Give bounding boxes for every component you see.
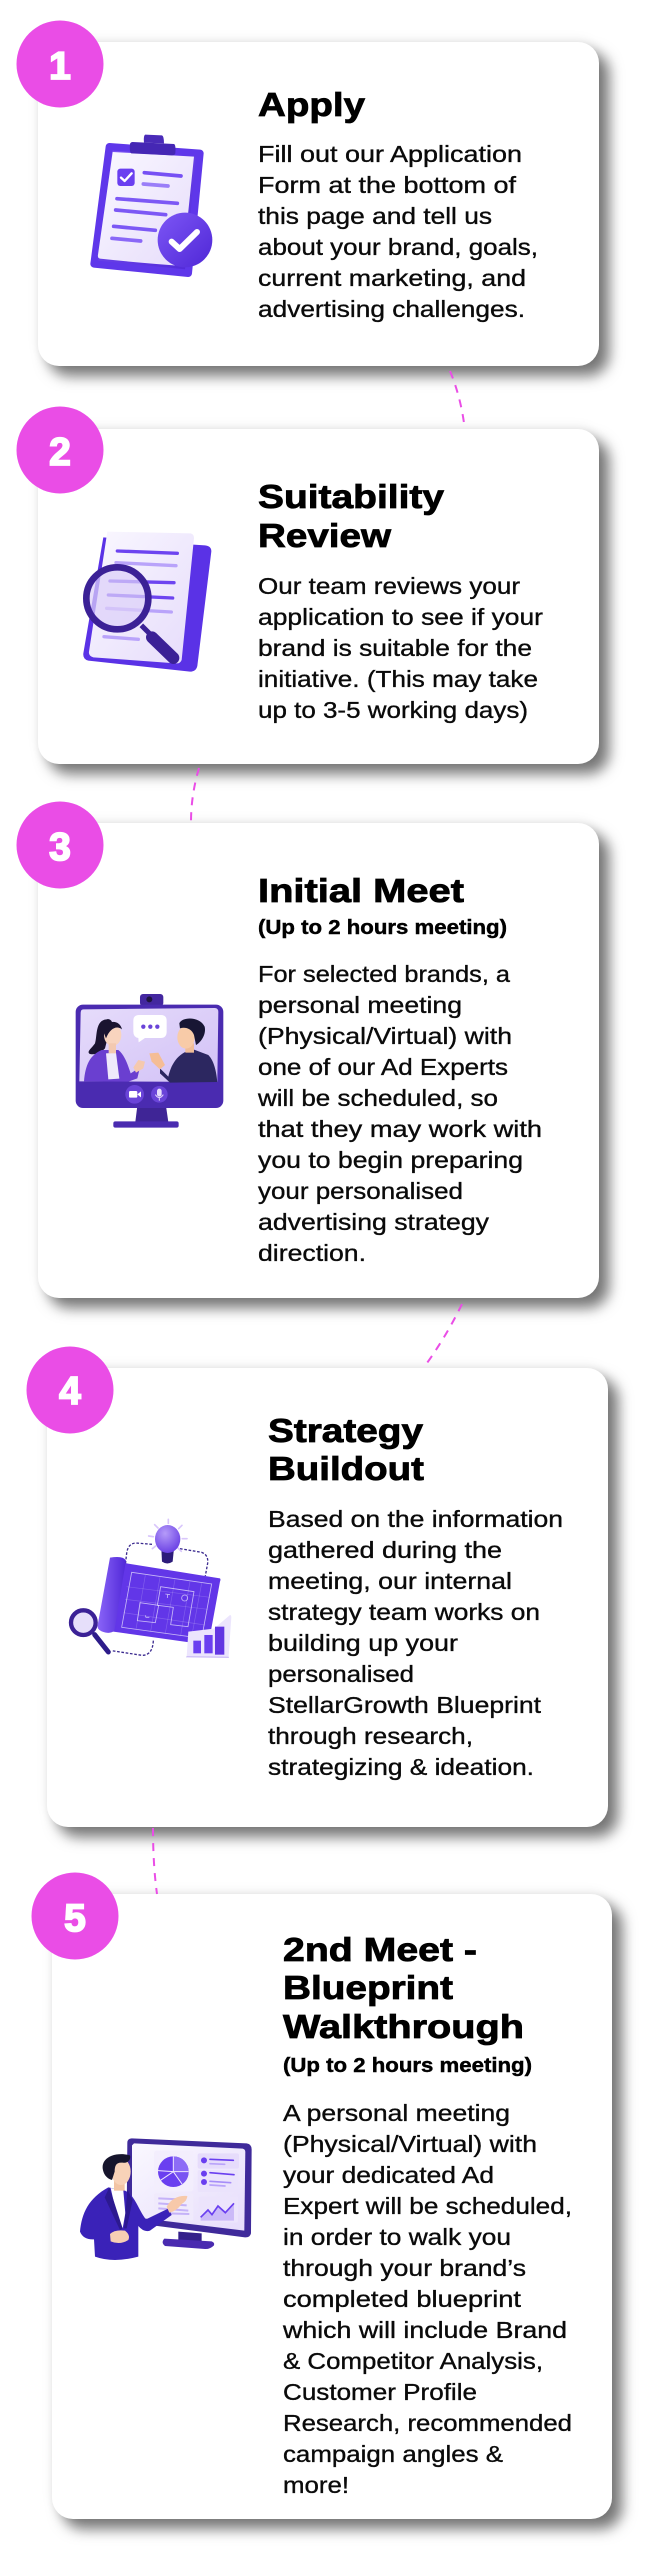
body text: personal meeting [258, 992, 462, 1018]
body text [268, 1506, 563, 1780]
body text: direction. [258, 1240, 366, 1266]
card background [52, 1894, 612, 2519]
woman [89, 1019, 112, 1054]
step number badge 2: 2 [49, 431, 71, 474]
body text: your personalised [258, 1178, 463, 1204]
heading: Buildout [268, 1450, 424, 1487]
step number badge 5: 5 [64, 1897, 86, 1940]
body text: through research, [268, 1723, 473, 1749]
body text: Customer Profile [283, 2379, 477, 2405]
body text: this page and tell us [258, 203, 492, 229]
heading: Apply [258, 86, 366, 123]
body text: campaign angles & [283, 2441, 503, 2467]
body text: completed blueprint [283, 2286, 522, 2312]
step number badge 4 [26, 1346, 114, 1434]
body text [258, 141, 538, 322]
body text: Research, recommended [283, 2410, 572, 2436]
connector: step 4 to step 5 [153, 1828, 157, 1894]
body text: up to 3-5 working days) [258, 697, 528, 723]
heading [283, 1931, 524, 2045]
icon: video call monitor [76, 994, 223, 1128]
body text: about your brand, goals, [258, 234, 538, 260]
step number badge 5 [32, 1872, 118, 1960]
body text: Our team reviews your [258, 573, 520, 599]
body text: application to see if your [258, 604, 543, 630]
body text: advertising challenges. [258, 296, 525, 322]
heading: Blueprint [283, 1969, 453, 2006]
heading: Suitability [258, 478, 445, 515]
body text [282, 2100, 572, 2498]
heading: Initial Meet [258, 872, 464, 909]
panel: step 1 apply [16, 20, 599, 366]
heading: Review [258, 517, 391, 554]
body text: which will include Brand [282, 2317, 567, 2343]
speech bubble [133, 1015, 167, 1042]
body text: in order to walk you [283, 2224, 511, 2250]
body text: you to begin preparing [258, 1147, 523, 1173]
heading: 2nd Meet - [283, 1931, 477, 1968]
body text: through your brand’s [283, 2255, 526, 2281]
card background [38, 823, 599, 1298]
step number badge 1: 1 [49, 45, 71, 88]
body text: For selected brands, a [258, 961, 510, 987]
body text [257, 961, 542, 1266]
body text: StellarGrowth Blueprint [268, 1692, 542, 1718]
body text: one of our Ad Experts [258, 1054, 508, 1080]
body text: Fill out our Application [258, 141, 522, 167]
body text: your dedicated Ad [283, 2162, 494, 2188]
body text: brand is suitable for the [258, 635, 532, 661]
panel: step 4 strategy buildout [26, 1346, 608, 1827]
body text: Form at the bottom of [258, 172, 517, 198]
connector: step 3 to step 4 [427, 1304, 462, 1363]
heading: Strategy [268, 1412, 424, 1449]
body text: strategy team works on [268, 1599, 540, 1625]
body text: (Physical/Virtual) with [258, 1023, 512, 1049]
body text: strategizing & ideation. [268, 1754, 534, 1780]
body text: meeting, our internal [268, 1568, 512, 1594]
card background [38, 42, 599, 366]
body text: & Competitor Analysis, [283, 2348, 543, 2374]
body text: (Physical/Virtual) with [283, 2131, 537, 2157]
step number badge 3 [16, 802, 104, 888]
connector: step 1 to step 2 [450, 371, 464, 423]
body text: advertising strategy [258, 1209, 490, 1235]
card background [47, 1368, 608, 1827]
step number badge 1 [16, 20, 104, 108]
card background [38, 429, 599, 764]
body text: will be scheduled, so [257, 1085, 498, 1111]
icon: presenter with dashboard monitor [80, 2138, 252, 2260]
panel: step 3 initial meet [16, 802, 599, 1298]
body text: building up your [268, 1630, 458, 1656]
icon: document and magnifier [83, 532, 211, 672]
panel: step 2 suitability review [16, 406, 599, 764]
subheading: (Up to 2 hours meeting) [283, 2055, 532, 2077]
heading [258, 478, 445, 554]
man [160, 1049, 217, 1083]
icon: clipboard with check [94, 135, 212, 273]
body text: personalised [268, 1661, 414, 1687]
body text: initiative. (This may take [258, 666, 538, 692]
icon: blueprint, bulb, chart and magnifier [71, 1519, 231, 1658]
body text: A personal meeting [283, 2100, 510, 2126]
body text: Based on the information [268, 1506, 563, 1532]
step number badge 2 [16, 406, 104, 494]
heading [268, 1412, 424, 1487]
step number badge 4: 4 [59, 1370, 81, 1413]
body text: gathered during the [268, 1537, 502, 1563]
connector: step 2 to step 3 [191, 768, 199, 822]
body text: Expert will be scheduled, [283, 2193, 572, 2219]
buttons [125, 1085, 144, 1104]
subheading: (Up to 2 hours meeting) [258, 917, 507, 939]
body text [258, 573, 543, 723]
body text: current marketing, and [258, 265, 526, 291]
body text: that they may work with [258, 1116, 542, 1142]
panel: step 5 second meet blueprint walkthrough [32, 1872, 612, 2519]
step number badge 3: 3 [49, 826, 71, 869]
heading: Walkthrough [283, 2008, 524, 2045]
body text: more! [283, 2472, 349, 2498]
